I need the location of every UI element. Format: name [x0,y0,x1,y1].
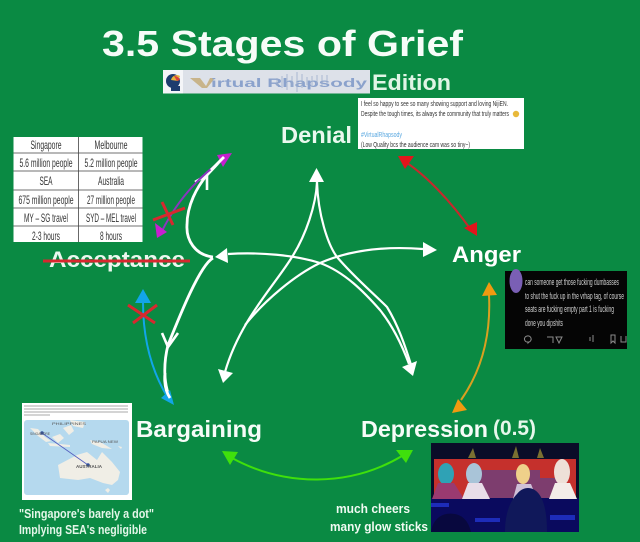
tweet screenshot: Denial: #VirtualRhapsody [361,132,402,139]
subtitle: Virtual Rhapsody logo and Edition: Edition [372,70,451,95]
repaint white tail over blue arrow [165,373,170,398]
purple double arrow with red cross [153,153,232,238]
caption: Bargaining: "Singapore's barely a dot" [19,507,154,521]
subtitle: Virtual Rhapsody logo and Edition [163,70,451,95]
map screenshot: AUSTRALIA [76,464,103,469]
concert photo [431,443,579,532]
tweet screenshot: Denial [358,98,524,149]
comparison table: 27 million people [87,193,135,207]
subtitle: Virtual Rhapsody logo and Edition: irtual Rhapsody [211,76,368,90]
heading: Bargaining: Bargaining [136,416,262,442]
comparison table: 5.2 million people [84,156,138,170]
red double arrow: Denial to Anger [398,156,477,236]
heading: Denial: Denial [281,122,352,148]
heading: Depression (0.5): Depression [361,416,488,442]
comparison table: SEA [40,174,52,188]
caption: Bargaining [19,507,154,537]
tweet screenshot: Denial: (Low Quality bcs the audience cam was so tiny~) [361,142,470,149]
orange double arrow: Anger to Depression [452,282,497,413]
comparison table: SYD – MEL travel [86,211,136,225]
comparison table [14,137,142,243]
heading: Depression (0.5): (0.5) [493,417,536,440]
tweet screenshot: Anger [505,269,627,349]
caption: Depression: much cheers [336,502,410,516]
heading: Anger: Anger [452,242,521,267]
white cycle arrows [162,157,437,398]
tweet screenshot: Denial: I feel so happy to see so many showing support and loving NijiEN. [361,101,508,108]
map screenshot: PHILIPPINES [52,422,87,426]
map screenshot: SINGAPORE [30,432,50,436]
map screenshot: PAPUA NEW [92,440,118,444]
caption: Depression: many glow sticks [330,520,428,534]
title: 3.5 Stages of Grief [102,23,464,64]
comparison table: Melbourne [94,138,128,152]
blue double arrow with red cross [128,289,174,405]
caption: Depression [330,502,428,534]
map screenshot [22,403,132,500]
comparison table: 2-3 hours [32,229,60,243]
comparison table: 675 million people [18,193,74,207]
comparison table: Singapore [30,138,62,152]
comparison table: Australia [98,174,124,188]
green double arrow: Bargaining to Depression [222,450,413,480]
comparison table: 8 hours [100,229,122,243]
comparison table: 5.6 million people [20,156,73,170]
tweet screenshot: Denial: Despite the tough times, its always the community that truly matters [361,111,509,118]
caption: Bargaining: Implying SEA's negligible [19,523,147,537]
comparison table: MY – SG travel [24,211,68,225]
heading: Acceptance struck through: Acceptance [49,247,185,272]
tweet screenshot: Anger: done you dipshits [525,318,563,328]
